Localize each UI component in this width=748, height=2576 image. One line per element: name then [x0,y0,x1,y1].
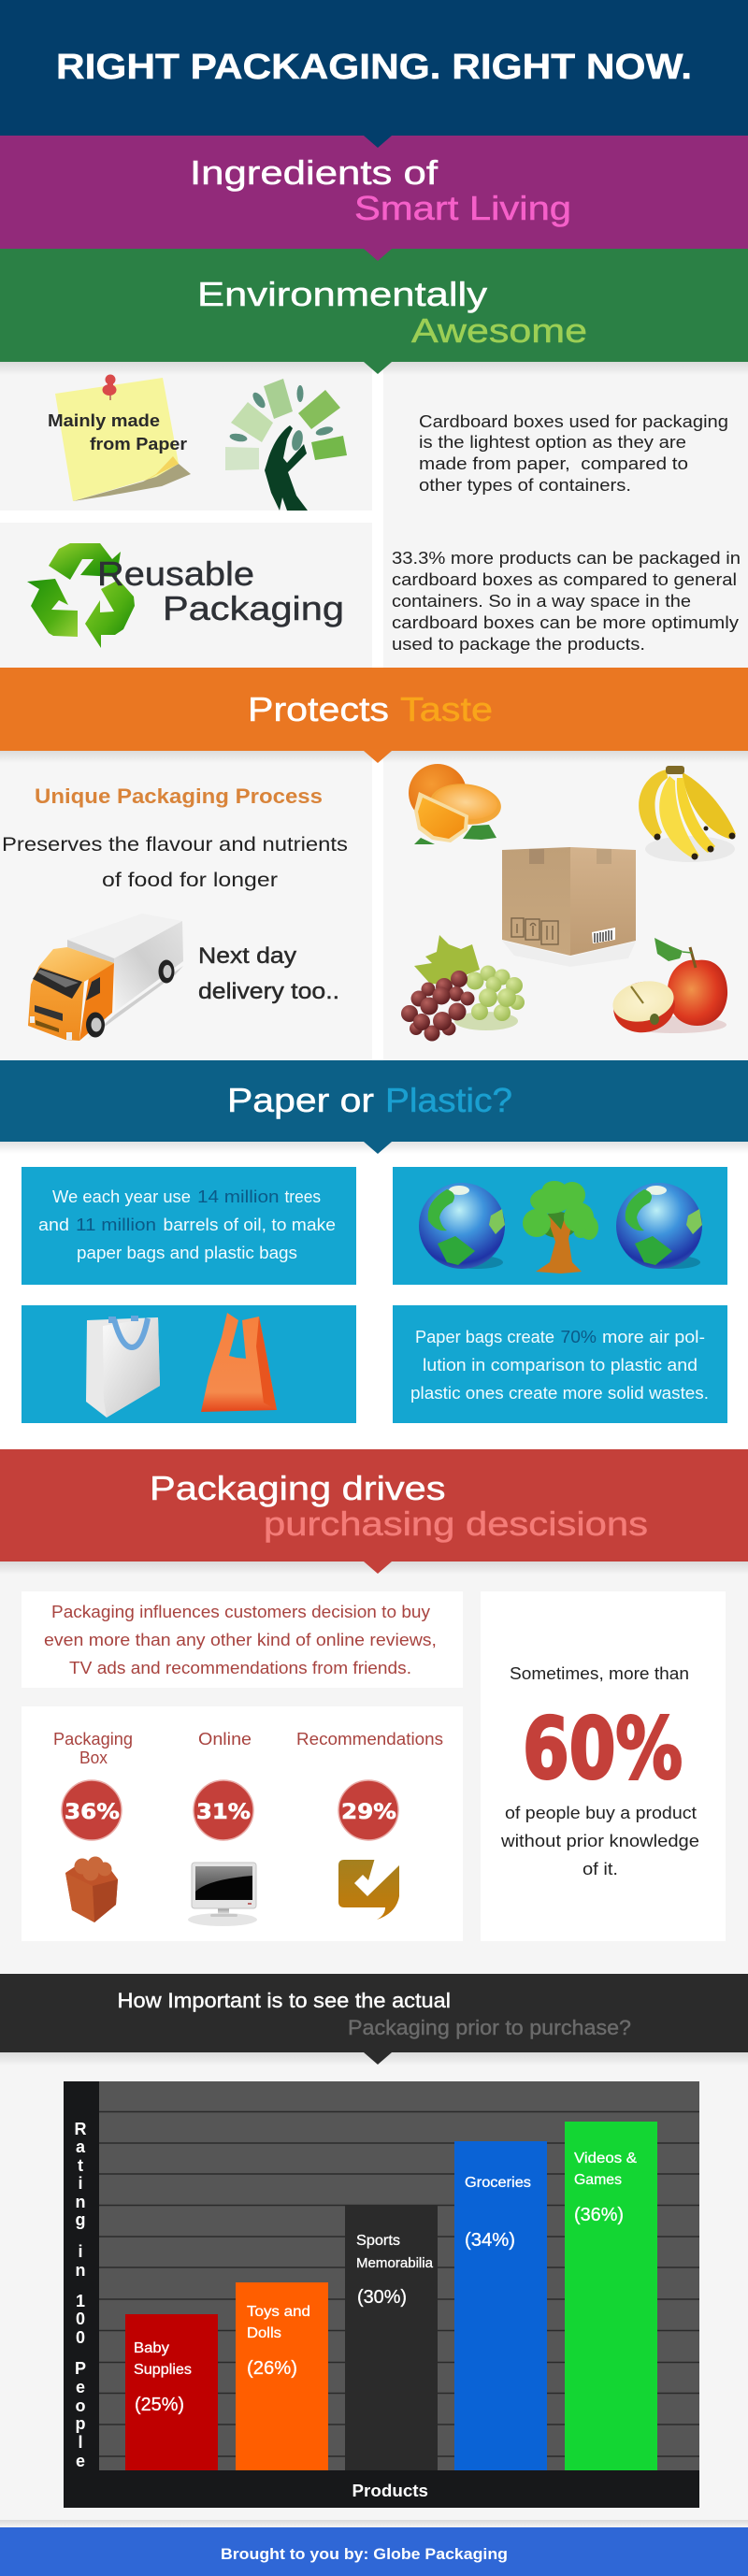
y axis label: rating in 100 people: e [76,2378,85,2396]
text: of people buy: of it. [583,1860,618,1878]
text: preserves flavour [2,834,348,891]
y axis label: rating in 100 people: 1 [76,2292,85,2310]
text: cardboard lightest option: Cardboard boxes used for packaging [419,411,728,431]
y axis label: rating in 100 people [75,2120,86,2470]
bar: toys and dolls: Toys and [247,2304,310,2320]
panel: 14 million trees: trees [284,1187,321,1206]
title: RIGHT PACKAGING. RIGHT NOW. [56,48,692,87]
heading: ingredients of smart living: Ingredients of [190,153,439,192]
panel: 14 million trees: 14 million [197,1187,279,1206]
icon: apples [609,938,727,1038]
y axis label: rating in 100 people: e [76,2452,85,2470]
heading: environmentally awesome [197,275,587,350]
bar: videos and games: Videos & [574,2151,637,2166]
y axis label: rating in 100 people: n [75,2261,86,2280]
y axis label: rating in 100 people: P [75,2359,86,2378]
icon: recycling arrows [27,543,135,648]
y axis label: rating in 100 people: 0 [76,2310,85,2328]
text: preserves flavour: of food for longer [102,870,278,891]
panel: 14 million trees: barrels of oil, to make [163,1216,336,1234]
badge: 31%: 31% [196,1801,251,1824]
panel: 14 million trees: and [38,1216,69,1234]
heading: protects taste [248,690,493,728]
text: cardboard lightest option: made from paper, compared to [419,453,688,473]
y axis label: rating in 100 people: n [75,2193,86,2211]
y axis label: rating in 100 people: t [78,2156,83,2175]
bar: baby supplies: (25%) [135,2395,184,2415]
text: reusable packaging: Packaging [163,589,344,627]
text: mainly made from paper: from Paper [90,435,187,453]
heading: environmentally awesome: Environmentally [197,275,487,313]
text: 33.3% more products: cardboard boxes as compared to general [392,569,737,589]
icon: sticky note [55,378,191,501]
bar: toys and dolls: (26%) [247,2358,297,2379]
badge: 29% [338,1780,398,1840]
banner: protects taste [0,668,748,763]
heading: how important: How Important is to see the actual [118,1989,451,2012]
text: 33.3% more products: used to package the products. [392,634,645,654]
icon: cardboard box [502,847,636,967]
heading: environmentally awesome: Awesome [411,311,587,350]
text: sometimes more than: Sometimes, more than [510,1664,689,1683]
icon: tree [523,1181,598,1274]
text: 33.3% more products: 33.3% more products can be packaged in [392,548,741,568]
text: of people buy: of people buy a product [505,1804,697,1822]
bar: videos and games: Games [574,2172,622,2188]
icon: paper bag [86,1316,160,1418]
heading: packaging drives purchasing descisions [150,1469,648,1543]
x axis label: products: Products [352,2482,428,2500]
badge: 36%: 36% [65,1801,120,1824]
heading: paper or plastic [227,1081,512,1119]
icon: paper tree [225,379,347,511]
bar: baby supplies: Baby [134,2340,169,2356]
text: cardboard lightest option: is the lightest option as they are [419,432,686,452]
panel: 70% more air pollution: more air pol- [602,1328,705,1346]
panel: 14 million trees: We each year use [52,1187,191,1206]
bar: baby supplies [125,2314,218,2470]
bar: groceries [454,2141,547,2470]
icon: check bubble [338,1859,400,1920]
panel: bags [22,1305,356,1423]
bar: baby supplies: Supplies [134,2362,192,2378]
y axis label: rating in 100 people: a [76,2137,86,2156]
text: next day delivery [198,943,339,1004]
section: packaging drives decisions [22,1591,726,1941]
panel: 70% more air pollution: Paper bags create [415,1328,554,1346]
panel: mainly made from paper [0,362,372,511]
icon: globe right [616,1183,702,1269]
text: reusable packaging [97,554,344,627]
bar: toys and dolls [236,2282,328,2470]
text: preserves flavour: Preserves the flavour and nutrients [2,834,348,856]
text: mainly made from paper [48,411,187,453]
labels: influence names: Online [198,1730,252,1749]
banner: how important [0,1974,748,2065]
icon: globe left [419,1183,505,1269]
text: reusable packaging: Reusable [97,554,254,593]
panel: influence text: Packaging influences customers decision to buy [51,1603,430,1621]
bar: sports memorabilia: Memorabilia [356,2256,434,2271]
stat: 60%: 60% [523,1700,683,1798]
text: mainly made from paper: Mainly made [48,411,160,430]
banner: environmentally awesome [0,249,748,375]
heading: ingredients of smart living [190,153,571,227]
banner: title [0,0,748,148]
badge: 36% [62,1780,122,1840]
y axis label: rating in 100 people: l [78,2433,83,2452]
footer [0,2520,748,2576]
text: of people buy: without prior knowledge [500,1832,699,1850]
heading: protects taste: Protects [248,690,389,728]
text: 33.3% more products: containers. So in a way space in the [392,591,691,611]
plot background [64,2081,699,2508]
heading: paper or plastic: Paper or [227,1081,374,1119]
y axis label: rating in 100 people: R [75,2120,86,2138]
heading: packaging drives purchasing descisions: Packaging drives [150,1469,445,1507]
heading: unique packaging process: Unique Packaging Process [35,784,323,808]
panel: globes and tree [393,1167,727,1285]
heading: packaging drives purchasing descisions: purchasing descisions [264,1504,648,1543]
icon: grapes [401,935,525,1042]
panel: influence text [22,1591,463,1688]
text: 33.3% more products [392,548,741,654]
panel: cardboard facts [383,362,748,668]
heading: protects taste: Taste [400,690,493,728]
text: next day delivery: Next day [198,943,296,969]
y axis label: rating in 100 people: o [75,2396,86,2415]
panel: reusable packaging [0,523,372,668]
panel: 70% more air pollution: lution in comparison to plastic and [423,1356,698,1374]
icon: plastic bag [201,1313,277,1412]
labels: influence names: Recommendations [296,1730,443,1749]
banner: paper or plastic [0,1060,748,1154]
bar: toys and dolls: Dolls [247,2325,281,2341]
bar: groceries: (34%) [465,2230,515,2251]
heading: paper or plastic: Plastic? [385,1081,512,1119]
heading: ingredients of smart living: Smart Living [354,189,571,227]
panel: 70% more air pollution: 70% [561,1328,597,1346]
heading: how important [118,1989,631,2039]
icon: red pin [103,374,116,400]
section: paper or plastic [22,1167,727,1423]
icon: monitor [188,1863,257,1926]
bar: videos and games: (36%) [574,2205,624,2225]
footer text: Brought to you by: Globe Packaging [221,2545,508,2563]
panel: influence text: TV ads and recommendations from friends. [69,1659,411,1677]
icon: bananas [639,766,736,862]
icon: delivery truck [28,914,183,1041]
panel: fruits and box [383,751,748,1060]
panel: three influences [22,1706,463,1941]
labels: influence names: Packaging [53,1730,133,1749]
text: cardboard lightest option [419,411,728,495]
text: cardboard lightest option: other types of containers. [419,475,631,495]
bar: sports memorabilia [345,2205,438,2470]
panel: 60 percent [481,1591,726,1941]
bar: videos and games [565,2122,657,2470]
bar: sports memorabilia: (30%) [357,2287,407,2308]
labels: influence names: Box [79,1749,108,1767]
banner: packaging drives [0,1449,748,1575]
banner: ingredients of smart living [0,136,748,261]
panel: 70% more air pollution: plastic ones create more solid wastes. [410,1384,709,1403]
panel: 70% more air pollution [393,1305,727,1423]
panel: environmentally awesome [0,362,748,668]
text: next day delivery: delivery too.. [198,979,339,1004]
bar: sports memorabilia: Sports [356,2233,400,2249]
panel: 14 million trees [22,1167,356,1285]
bar: groceries: Groceries [465,2175,531,2191]
heading: how important: Packaging prior to purchase? [348,2016,631,2039]
icon: oranges [409,764,503,844]
text: of people buy [500,1804,699,1878]
panel: protects taste left [0,751,372,1060]
text: 33.3% more products: cardboard boxes can be more optimumly [392,612,740,632]
labels: influence names [53,1730,443,1767]
y axis label: rating in 100 people: i [78,2242,83,2261]
y axis label: rating in 100 people: 0 [76,2328,85,2347]
y axis label: rating in 100 people: i [78,2174,83,2193]
panel: 14 million trees: 11 million [76,1216,156,1234]
badge: 29%: 29% [341,1801,396,1824]
badge: 31% [194,1780,253,1840]
y axis label: rating in 100 people: p [75,2414,86,2433]
bar chart [64,2081,699,2508]
y axis label: rating in 100 people: g [75,2210,86,2229]
icon: gift box [65,1857,118,1922]
panel: influence text: even more than any other kind of online reviews, [44,1631,437,1649]
panel: 14 million trees: paper bags and plastic bags [77,1244,297,1262]
